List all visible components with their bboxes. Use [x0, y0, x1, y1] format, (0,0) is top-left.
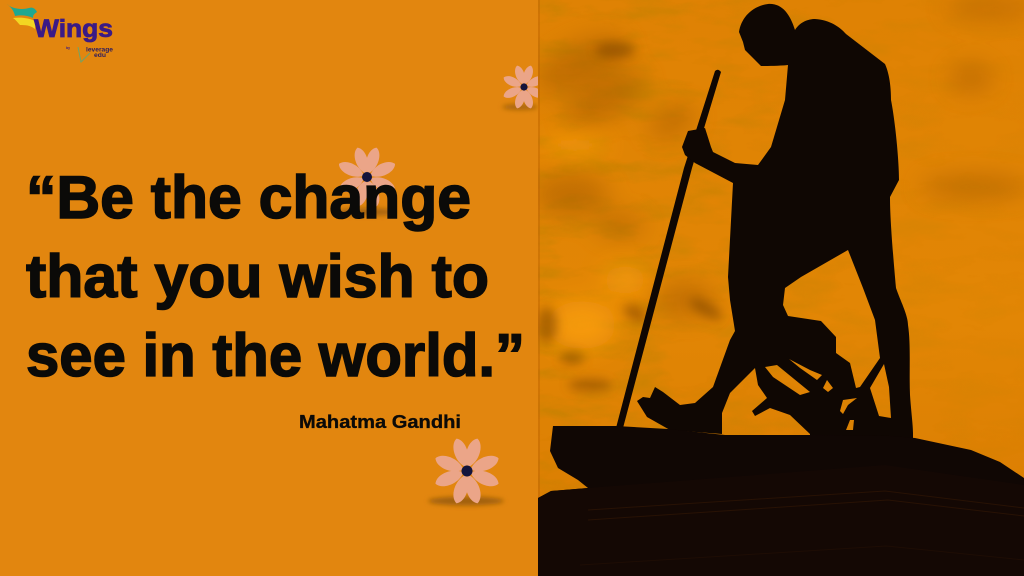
icon: flower bottom	[428, 437, 504, 506]
sky gradient	[540, 0, 1024, 496]
panel: orange background	[0, 0, 538, 576]
logo: Wings by leverage edu: by	[66, 46, 70, 50]
logo: Wings by leverage edu: edu	[94, 52, 106, 59]
logo: Wings by leverage edu: Wings	[34, 15, 113, 43]
icon: flower behind quote	[336, 146, 398, 216]
sky clouds	[538, 0, 1024, 488]
silhouette: walking stick	[616, 70, 721, 428]
panel: sunset photo	[526, 0, 1024, 576]
logo: Wings by leverage edu	[7, 4, 113, 62]
quote text: “Be the change	[26, 164, 471, 231]
pedestal	[538, 426, 1024, 576]
icon: flower top right	[502, 66, 538, 112]
attribution: Mahatma Gandhi	[299, 412, 461, 432]
quote text: that you wish to	[26, 243, 489, 310]
quote text	[26, 164, 525, 389]
quote text: see in the world.”	[26, 322, 525, 389]
silhouette: Gandhi statue	[637, 4, 913, 442]
logo: Wings by leverage edu: leverage	[86, 46, 113, 54]
photo left edge	[538, 0, 540, 498]
